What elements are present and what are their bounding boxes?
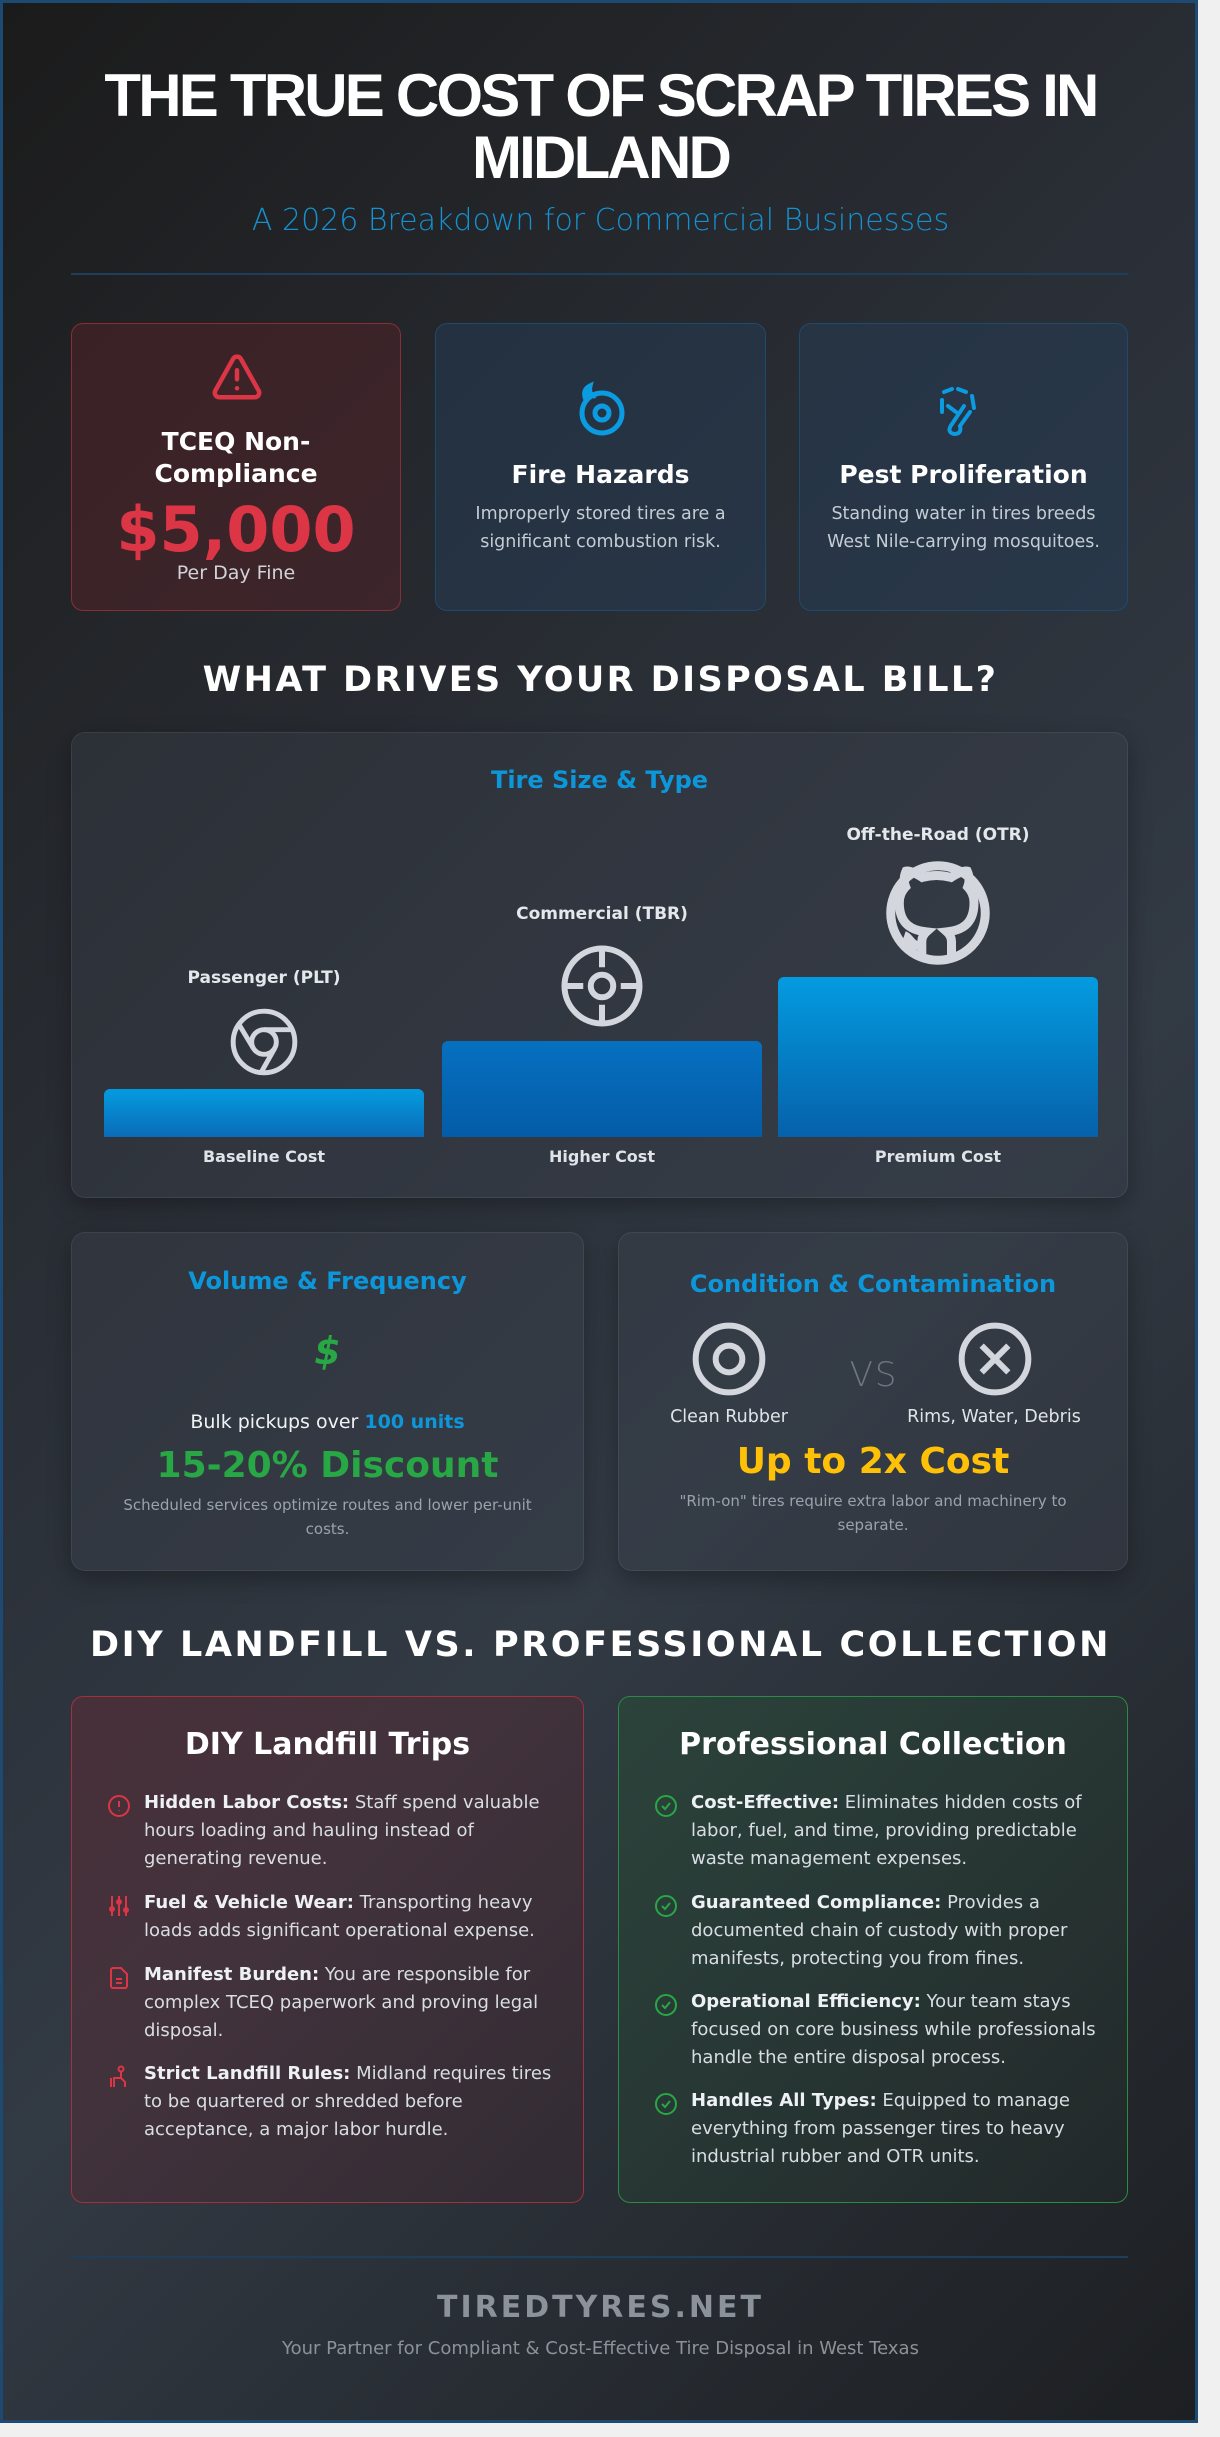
stat: $5,000: $5,000 (116, 493, 356, 566)
panel: volume & frequency: Scheduled services optimize routes and lower per-unit costs. (123, 1496, 532, 1538)
heading (154, 427, 318, 488)
item: cost-effective: Cost-Effective: Eliminates hidden costs of labor, fuel, and time, providing predictable waste management expenses. (691, 1792, 1082, 1869)
panel: DIY landfill: DIY Landfill Trips (185, 1727, 470, 1762)
description (475, 504, 726, 552)
panel: condition & contamination: Clean Rubber (670, 1407, 788, 1427)
icon: fire tire (580, 381, 624, 436)
axis labels: Baseline Cost (203, 1147, 325, 1166)
bar: passenger (104, 968, 424, 1137)
description: Standing water in tires breeds (831, 504, 1096, 524)
item: manifest: Manifest Burden: You are responsible for complex TCEQ paperwork and proving legal disposal. (144, 1964, 538, 2041)
icon: clean rubber (692, 1322, 766, 1396)
icon: warning (212, 354, 262, 400)
title: MIDLAND (472, 124, 729, 191)
panel: professional collection: Professional Collection (679, 1727, 1067, 1762)
section heading: DIY vs professional: DIY LANDFILL VS. PROFESSIONAL COLLECTION (90, 1625, 1111, 1665)
item: all types: Handles All Types: Equipped to manage everything from passenger tires to heavy industrial rubber and OTR units. (691, 2090, 1070, 2167)
description: West Nile-carrying mosquitoes. (827, 532, 1100, 552)
stat: 2x cost: Up to 2x Cost (737, 1441, 1009, 1482)
panel: condition & contamination: "Rim-on" tires require extra labor and machinery to separate. (679, 1492, 1067, 1534)
card: TCEQ fine: Per Day Fine (177, 562, 295, 584)
title (104, 62, 1097, 191)
item: labor: Hidden Labor Costs: Staff spend valuable hours loading and hauling instead of generating revenue. (144, 1792, 540, 1869)
heading: TCEQ Non- (162, 427, 310, 456)
bar: passenger: Passenger (PLT) (188, 968, 340, 988)
icon: mosquito (940, 386, 976, 436)
panel: volume & frequency: Bulk pickups over 100 units (190, 1411, 465, 1433)
chart title: Tire Size & Type (491, 766, 708, 794)
bar: off-the-road: Off-the-Road (OTR) (846, 825, 1030, 845)
panel: tire size chart (71, 732, 1128, 1198)
panel: tire size chart: Premium Cost (875, 1147, 1001, 1166)
item: landfill rules: Strict Landfill Rules: Midland requires tires to be quartered or shredded before acceptance, a major labor hurdle. (144, 2063, 551, 2140)
footer tagline: Your Partner for Compliant & Cost-Effective Tire Disposal in West Texas (282, 2338, 919, 2359)
panel: volume & frequency: Volume & Frequency (188, 1267, 467, 1295)
panel: condition & contamination: Condition & Contamination (690, 1270, 1056, 1298)
subtitle: A 2026 Breakdown for Commercial Businesses (252, 203, 949, 238)
panel: condition & contamination: VS (850, 1355, 898, 1395)
panel: tire size chart: Higher Cost (549, 1147, 655, 1166)
icon: contaminated (958, 1322, 1032, 1396)
bar: commercial (442, 904, 762, 1137)
panel: professional collection (618, 1696, 1128, 2203)
footer brand: TIREDTYRES.NET (437, 2290, 764, 2325)
description: significant combustion risk. (480, 532, 721, 552)
heading: Pest Proliferation (839, 460, 1088, 489)
icon: dollar: $ (314, 1329, 341, 1373)
title: THE TRUE COST OF SCRAP TIRES IN (104, 62, 1097, 129)
heading: Compliance (154, 459, 318, 488)
panel: volume & frequency (71, 1232, 584, 1571)
panel: condition & contamination (618, 1232, 1128, 1571)
stat: discount: 15-20% Discount (157, 1445, 498, 1486)
heading: Fire Hazards (512, 460, 689, 489)
section heading: disposal bill: WHAT DRIVES YOUR DISPOSAL BILL? (203, 660, 998, 700)
card: pest proliferation (799, 323, 1128, 611)
item: compliance: Guaranteed Compliance: Provides a documented chain of custody with proper manifests, protecting you from fines. (691, 1892, 1067, 1969)
description (827, 504, 1100, 552)
panel: condition & contamination: Rims, Water, Debris (907, 1407, 1081, 1427)
panel: DIY landfill (71, 1696, 584, 2203)
card: TCEQ fine (71, 323, 401, 611)
item: fuel: Fuel & Vehicle Wear: Transporting heavy loads adds significant operational expense. (144, 1892, 535, 1941)
card: fire hazards (435, 323, 766, 611)
bar: off-the-road (778, 825, 1098, 1137)
description: Improperly stored tires are a (475, 504, 726, 524)
item: efficiency: Operational Efficiency: Your team stays focused on core business while professionals handle the entire disposal process. (691, 1991, 1096, 2068)
bar: commercial: Commercial (TBR) (516, 904, 688, 924)
